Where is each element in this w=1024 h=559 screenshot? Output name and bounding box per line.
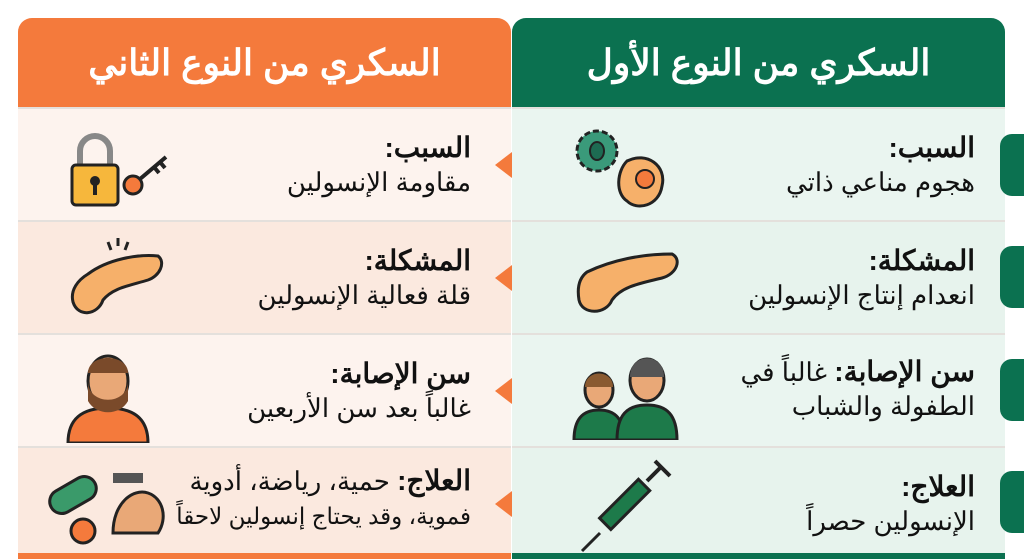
tabs: green side markers: [1000, 134, 1024, 533]
heading: type 2: السكري من النوع الثاني: [88, 42, 441, 83]
row: cause type 2: السبب:: [384, 132, 471, 163]
row: cause type 2: [18, 107, 511, 221]
row: treatment type 2: العلاج: حمية، رياضة، أدوية: [189, 465, 471, 496]
heading: type 1: السكري من النوع الأول: [587, 42, 930, 83]
row: treatment type 1: [512, 446, 1005, 559]
row: cause type 1: السبب:: [888, 132, 975, 163]
heading: type 2: [18, 18, 511, 107]
row: treatment type 1: الإنسولين حصراً: [806, 506, 975, 536]
icon: tired pancreas: [70, 238, 164, 314]
row: treatment type 2: فموية، وقد يحتاج إنسولين لاحقاً: [176, 503, 471, 529]
icon: bearded man: [66, 354, 150, 443]
arrows: orange pointers: [495, 152, 512, 517]
heading: type 1: [512, 18, 1005, 107]
row: cause type 2: مقاومة الإنسولين: [287, 167, 471, 197]
row: age type 2: سن الإصابة:: [330, 358, 471, 389]
icon: pills and arm: [48, 473, 165, 544]
row: problem type 2: المشكلة:: [364, 245, 471, 276]
row: cause type 1: [512, 107, 1005, 221]
panel: type 2 (orange): [18, 18, 511, 559]
row: problem type 1: [512, 220, 1005, 334]
row: problem type 2: قلة فعالية الإنسولين: [258, 280, 471, 310]
panel: type 1 (green): [512, 18, 1005, 559]
row: problem type 2: [18, 220, 511, 334]
row: age type 1: [512, 333, 1005, 447]
icon: child and young adult: [572, 358, 678, 440]
row: problem type 1: المشكلة:: [868, 245, 975, 276]
icon: immune cell attack: [576, 130, 664, 208]
row: age type 2: غالباً بعد سن الأربعين: [247, 393, 471, 423]
row: treatment type 1: العلاج:: [901, 471, 975, 502]
row: age type 1: الطفولة والشباب: [792, 391, 975, 421]
row: age type 2: [18, 333, 511, 447]
icon: syringe: [581, 460, 672, 552]
row: treatment type 2: [18, 446, 511, 559]
row: age type 1: سن الإصابة: غالباً في: [740, 356, 975, 387]
icon: lock and key: [70, 133, 168, 206]
row: cause type 1: هجوم مناعي ذاتي: [786, 167, 975, 197]
icon: pancreas: [576, 252, 679, 313]
row: problem type 1: انعدام إنتاج الإنسولين: [748, 280, 975, 310]
